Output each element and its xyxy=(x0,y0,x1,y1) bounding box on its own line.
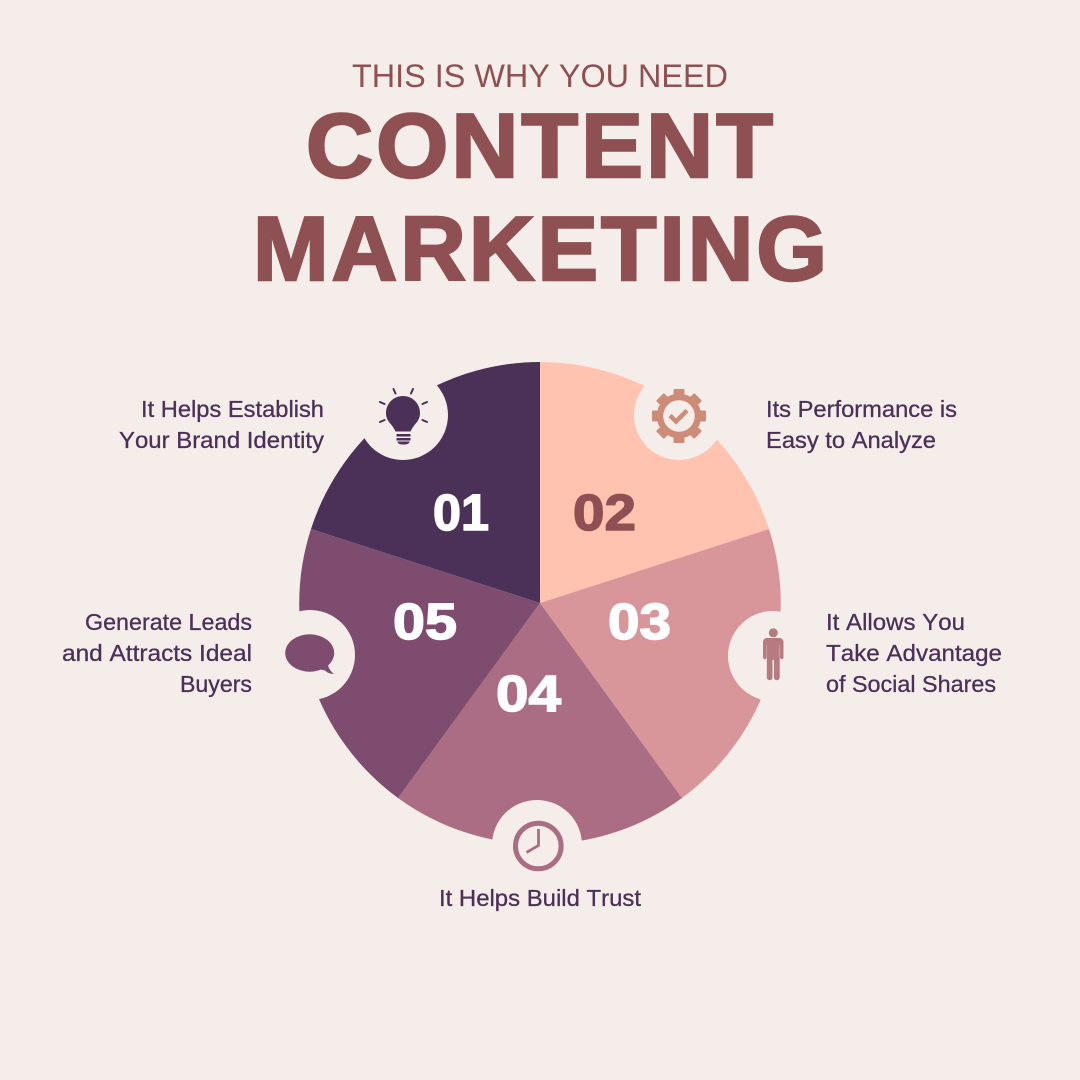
subtitle: THIS IS WHY YOU NEED xyxy=(352,58,728,94)
label 03: Take Advantage xyxy=(826,640,1002,666)
label 01: It Helps Establish xyxy=(141,396,324,422)
segment 02 xyxy=(540,362,769,603)
label 05 xyxy=(62,609,252,697)
icon: clock xyxy=(492,800,582,890)
number 01: 01 xyxy=(433,484,489,541)
label 03 xyxy=(826,609,1002,697)
icon: speech bubble xyxy=(265,610,355,700)
segment 05 xyxy=(299,529,540,798)
title line 1: CONTENT xyxy=(306,96,776,197)
segment 03 xyxy=(540,529,781,798)
title line 2: MARKETING xyxy=(253,199,830,300)
pie chart xyxy=(299,362,781,844)
number 04: 04 xyxy=(496,665,562,722)
label 05: Generate Leads xyxy=(85,609,252,635)
label 04: It Helps Build Trust xyxy=(439,885,642,911)
icon: person xyxy=(728,611,818,701)
number 02: 02 xyxy=(573,484,636,541)
number 05: 05 xyxy=(393,593,457,650)
label 05: and Attracts Ideal xyxy=(62,640,252,666)
label 03: It Allows You xyxy=(826,609,965,635)
label 03: of Social Shares xyxy=(826,671,996,697)
label 01: Your Brand Identity xyxy=(119,427,325,453)
segment 01 xyxy=(311,362,540,603)
label 02: Easy to Analyze xyxy=(766,427,936,453)
segment 04 xyxy=(398,603,682,844)
icon: light bulb xyxy=(358,370,448,460)
label 02 xyxy=(766,396,957,453)
icon: gear with check xyxy=(634,370,724,460)
label 02: Its Performance is xyxy=(766,396,957,422)
label 01 xyxy=(119,396,325,453)
number 03: 03 xyxy=(608,593,671,650)
label 05: Buyers xyxy=(180,671,252,697)
